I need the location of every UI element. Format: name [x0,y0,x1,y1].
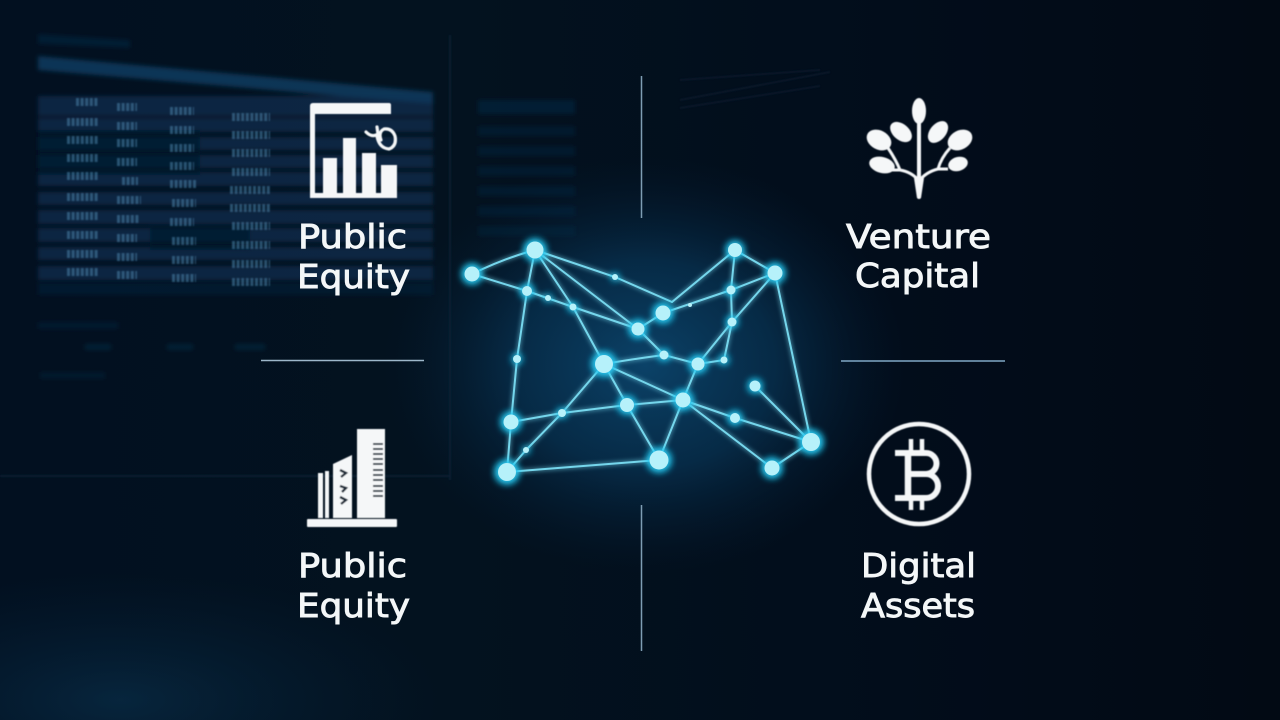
background: faint frame lines [0,35,830,480]
label: Venture Capital [846,217,991,295]
icon: bitcoin coin [869,424,969,524]
label: Public Equity: Equity [297,586,410,625]
panel: venture capital [846,98,991,295]
divider: bottom vertical [640,505,642,651]
network node halos [463,240,822,483]
label: Public Equity: Public [298,546,407,585]
label: Digital Assets [861,546,976,625]
panel: digital assets [861,424,976,625]
divider: left horizontal [261,360,424,362]
label: Public Equity: Equity [297,257,410,296]
label: Digital Assets: Digital [861,546,976,585]
panel: public equity bottom [297,429,410,625]
background: table digit columns [67,102,270,282]
icon: bar chart [310,103,397,198]
label: Venture Capital: Venture [846,217,991,256]
label: Public Equity [297,546,410,625]
divider: right horizontal [841,360,1005,362]
network nodes [464,242,820,481]
label: Public Equity [297,217,410,296]
label: Public Equity: Public [298,217,407,256]
network connections [472,250,811,472]
central network diagram [463,240,822,483]
label: Venture Capital: Capital [855,256,980,295]
icon: tree sprout [863,98,976,198]
panel: public equity top [297,103,410,296]
divider: top vertical [640,76,642,218]
label: Digital Assets: Assets [861,586,975,625]
icon: office buildings [307,429,397,527]
background: blurred data table [38,34,575,379]
